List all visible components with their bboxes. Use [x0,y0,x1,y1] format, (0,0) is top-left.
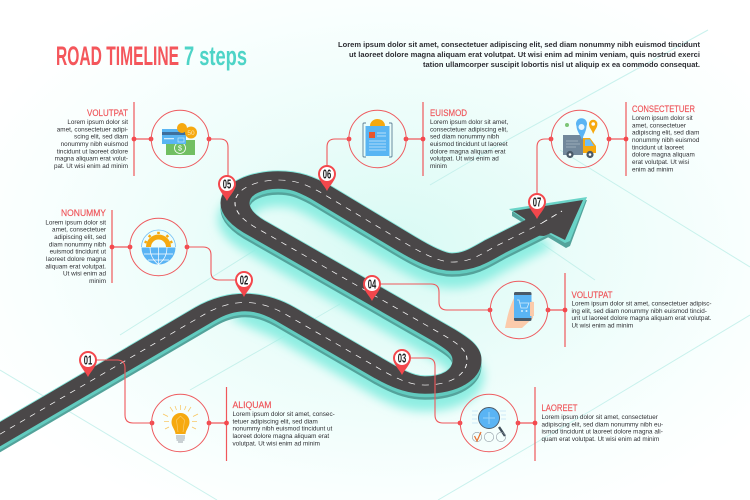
heading: LAOREET [542,403,578,413]
body text [542,414,663,443]
body text: diam nonummy nibh [49,241,106,248]
road surface [0,180,542,440]
heading: CONSECTETUER [632,104,695,114]
body text: laoreet dolore magna aliquam erat [232,433,329,440]
arrow head side [512,200,587,248]
body text: Lorem ipsum dolor sit [67,119,128,126]
pin 03 [393,349,411,375]
pin 03: 03 [398,351,406,366]
pin 07 [528,193,546,219]
body text: magna aliquam erat volut- [55,156,128,163]
centre dashes [0,180,542,440]
body text: enim ad minim [632,166,673,173]
icon: magnifier and checklist [472,408,506,442]
intro paragraph: tation ullamcorper suscipit lobortis nisl ut aliquip ex ea commodo consequat. [423,60,700,69]
body text: adipiscing elit, sed diam [632,130,699,137]
body text: unt ut laoreet dolore magna aliquam erat volutpat. [572,315,712,322]
body text: Lorem ipsum dolor sit amet, consec- [232,411,335,418]
circle [490,281,548,339]
step 4 block: volutpat [488,273,712,347]
body text: Ut wisi enim ad minim [572,322,633,330]
body text: Lorem ipsum dolor sit amet, consectetuer adipisc- [572,300,711,308]
body text: ing elit, sed diam nonummy nibh euismod tincid- [572,308,707,315]
icon: delivery truck [563,118,597,158]
icon: phone in hand [505,292,534,328]
body text: ismod tincidunt ut laoreet dolore magna ali- [542,429,663,436]
pin 04 [363,275,381,301]
heading: ALIQUAM [232,400,272,410]
pin 01 [79,351,97,377]
icon: card and cash: $ [178,146,182,152]
body text: laoreet dolore magna [46,256,106,263]
body text: Ut wisi enim ad [63,271,106,278]
icon: clipboard [363,119,392,157]
heading: VOLUTPAT [87,108,128,118]
body text: consectetuer adipiscing elit, [430,126,508,133]
body text: sed diam nonummy nibh [430,134,500,141]
body text: Lorem ipsum dolor sit [632,115,693,122]
intro paragraph: Lorem ipsum dolor sit amet, consectetuer adipiscing elit, sed diam nonummy nibh euismod tincidunt [338,40,700,49]
body text: adipiscing elit, sed [54,234,106,241]
body text: dolore magna aliquam erat [430,148,506,155]
pin 05: 05 [223,177,231,192]
body text: tincidunt ut laoreet dolore [57,148,128,155]
circle [151,110,209,168]
road glow [235,196,542,401]
body text: nonummy nibh euismod tincidunt ut [232,426,333,433]
pin 02: 02 [240,273,248,288]
circle [551,110,609,168]
pin 07: 07 [533,195,541,210]
body text [54,119,128,170]
body text: amet, consectetuer adipi- [57,126,128,133]
body text: Lorem ipsum dolor sit amet, consectetuer [542,414,658,421]
road [0,179,587,446]
body text: euismod tincidunt ut laoreet [430,141,508,148]
road side [0,186,542,446]
body text: amet, consectetuer [632,122,686,129]
body text: tetuer adipiscing elit, sed diam [232,418,318,425]
circle [130,218,187,276]
title: ROAD TIMELINE [56,41,179,71]
step 3 block: laoreet [458,387,663,461]
icon: card and cash: 50 [187,130,195,137]
body text [572,300,712,330]
body text [430,119,509,170]
body text: nonummy nibh euismod [61,141,128,148]
pin 01: 01 [84,353,92,368]
intro paragraph: ut laoreet dolore magna aliquam erat volutpat. Ut wisi enim ad minim veniam, quis nostrud exerci [349,50,700,59]
body text: Lorem ipsum dolor sit [45,219,106,226]
pin 02 [235,271,253,297]
circle [460,394,518,452]
body text: minim [89,278,106,285]
step 5 block: volutpat [54,102,211,176]
step 1 block: aliquam [150,387,335,461]
heading: EUISMOD [430,108,467,118]
pin 06: 06 [323,167,331,182]
circle [152,394,209,452]
body text: aliquam erat volutpat. [45,263,106,270]
body text: tincidunt ut laoreet [632,144,684,151]
step 6 block: euismod [347,102,509,176]
icon: light bulb [163,405,198,442]
icon: card and cash [162,123,197,155]
step 7 block: consectetuer [549,102,700,176]
body text [232,411,335,447]
body text: scing elit, sed diam [74,134,128,141]
body text: dolore magna aliquam [632,152,695,159]
pin 04: 04 [368,277,377,292]
arrow head [513,200,583,240]
intro paragraph [338,40,700,69]
body text: Lorem ipsum dolor sit amet, [430,119,509,126]
body text: erat volutpat. Ut wisi [632,159,689,166]
body text: euismod tincidunt ut [50,249,106,256]
body text [45,219,106,285]
body text: volutpat. Ut wisi enim ad [430,156,499,163]
title: 7 steps [184,41,247,71]
icon: gear and globe [142,230,176,264]
body text: quam erat volutpat. Ut wisi enim ad minim [542,436,659,443]
heading: VOLUTPAT [572,290,613,300]
body text: nonummy nibh euismod [632,137,700,144]
body text: pat. Ut wisi enim ad minim [54,163,128,170]
body text [632,115,700,173]
body text: adipiscing elit, sed diam nonummy nibh eu- [542,421,663,428]
body text: volutpat. Ut wisi enim ad minim [232,440,320,447]
pin 06 [318,165,336,191]
body text: amet, consectetuer [52,227,106,234]
step 2 block: nonummy [45,208,189,285]
pin 05 [218,175,236,201]
body text: minim [430,163,447,170]
circle [349,110,406,168]
connectors [92,139,551,423]
heading: NONUMMY [61,208,106,218]
